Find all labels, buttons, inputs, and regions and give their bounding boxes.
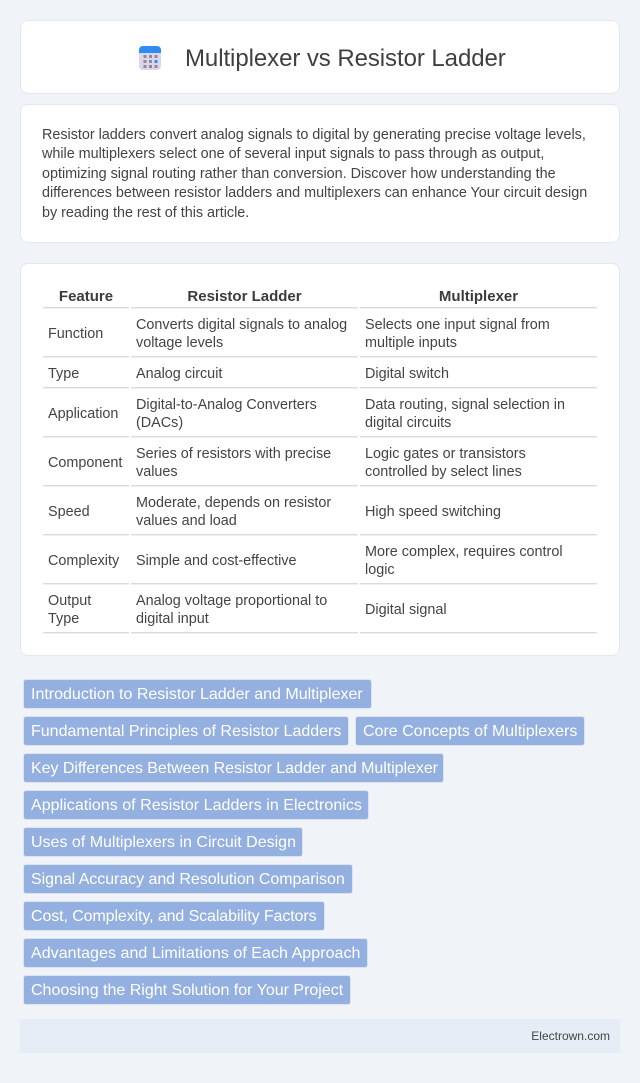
tag xyxy=(23,938,368,968)
title: Multiplexer vs Resistor Ladder xyxy=(185,45,506,72)
row: application: Application xyxy=(48,406,118,422)
intro text: by reading the rest of this article. xyxy=(42,204,249,220)
comparison table card xyxy=(20,263,620,656)
row: output type: Output xyxy=(48,593,91,609)
comparison table: Converts digital signals to analog xyxy=(136,317,347,333)
comparison table: Series of resistors with precise xyxy=(136,446,331,462)
tag: Core Concepts of Multiplexers xyxy=(363,723,577,740)
tag xyxy=(23,975,351,1005)
comparison table: (DACs) xyxy=(136,415,183,431)
comparison table: High speed switching xyxy=(365,504,501,520)
tag: Signal Accuracy and Resolution Comparison xyxy=(31,871,345,888)
tag: Key Differences Between Resistor Ladder and Multiplexer xyxy=(31,760,438,777)
comparison table: digital circuits xyxy=(365,415,451,431)
row: component: Component xyxy=(48,455,122,471)
tag xyxy=(23,716,349,746)
comparison table: More complex, requires control xyxy=(365,544,563,560)
comparison table: Digital signal xyxy=(365,602,447,618)
footer credit: Electrown.com xyxy=(531,1029,610,1043)
tag: Choosing the Right Solution for Your Project xyxy=(31,982,343,999)
tag xyxy=(23,864,353,894)
comparison table xyxy=(43,288,597,634)
comparison table: Analog circuit xyxy=(136,366,222,382)
row: complexity: Complexity xyxy=(48,553,119,569)
comparison table: Digital switch xyxy=(365,366,449,382)
comparison table: Digital-to-Analog Converters xyxy=(136,397,317,413)
comparison table: logic xyxy=(365,562,395,578)
intro text: optimizing signal routing rather than conversion. Discover how understanding the xyxy=(42,166,556,182)
comparison table: Data routing, signal selection in xyxy=(365,397,565,413)
comparison table: Analog voltage proportional to xyxy=(136,593,327,609)
row: output type: Type xyxy=(48,611,79,627)
row: output type xyxy=(48,593,92,627)
intro card xyxy=(20,104,620,243)
header: resistor ladder: Resistor Ladder xyxy=(187,288,302,305)
tag xyxy=(355,716,585,746)
comparison table: Selects one input signal from xyxy=(365,317,550,333)
tag: Fundamental Principles of Resistor Ladders xyxy=(31,723,341,740)
tag: Uses of Multiplexers in Circuit Design xyxy=(31,834,296,851)
intro text: Resistor ladders convert analog signals to digital by generating precise voltage levels, xyxy=(42,126,586,142)
row: speed: Speed xyxy=(48,504,90,520)
topic tags xyxy=(23,679,585,1005)
intro text: differences between resistor ladders and multiplexers can enhance Your circuit design xyxy=(42,185,587,201)
row: function: Function xyxy=(48,326,103,342)
tag: Cost, Complexity, and Scalability Factors xyxy=(31,908,316,925)
tag: Applications of Resistor Ladders in Electronics xyxy=(31,797,362,814)
tag xyxy=(23,753,444,783)
intro text: while multiplexers select one of several input signals to pass through as output, xyxy=(42,146,544,162)
header: feature: Feature xyxy=(59,288,113,305)
comparison table: controlled by select lines xyxy=(365,464,522,480)
comparison table: voltage levels xyxy=(136,335,223,351)
title card xyxy=(20,20,620,94)
intro text xyxy=(42,126,587,220)
comparison table: digital input xyxy=(136,611,209,627)
comparison table: multiple inputs xyxy=(365,335,457,351)
icon: calendar grid xyxy=(139,46,161,70)
tag xyxy=(23,901,325,931)
comparison table: values xyxy=(136,464,178,480)
tag xyxy=(23,827,303,857)
footer xyxy=(20,1019,620,1053)
tag xyxy=(23,790,369,820)
comparison table: Simple and cost-effective xyxy=(136,553,297,569)
comparison table: Logic gates or transistors xyxy=(365,446,526,462)
tag: Introduction to Resistor Ladder and Multiplexer xyxy=(31,686,363,703)
header: multiplexer: Multiplexer xyxy=(439,288,518,305)
comparison table: Moderate, depends on resistor xyxy=(136,495,331,511)
tag: Advantages and Limitations of Each Approach xyxy=(31,945,360,962)
tag xyxy=(23,679,372,709)
row: type: Type xyxy=(48,366,79,382)
comparison table: values and load xyxy=(136,513,237,529)
